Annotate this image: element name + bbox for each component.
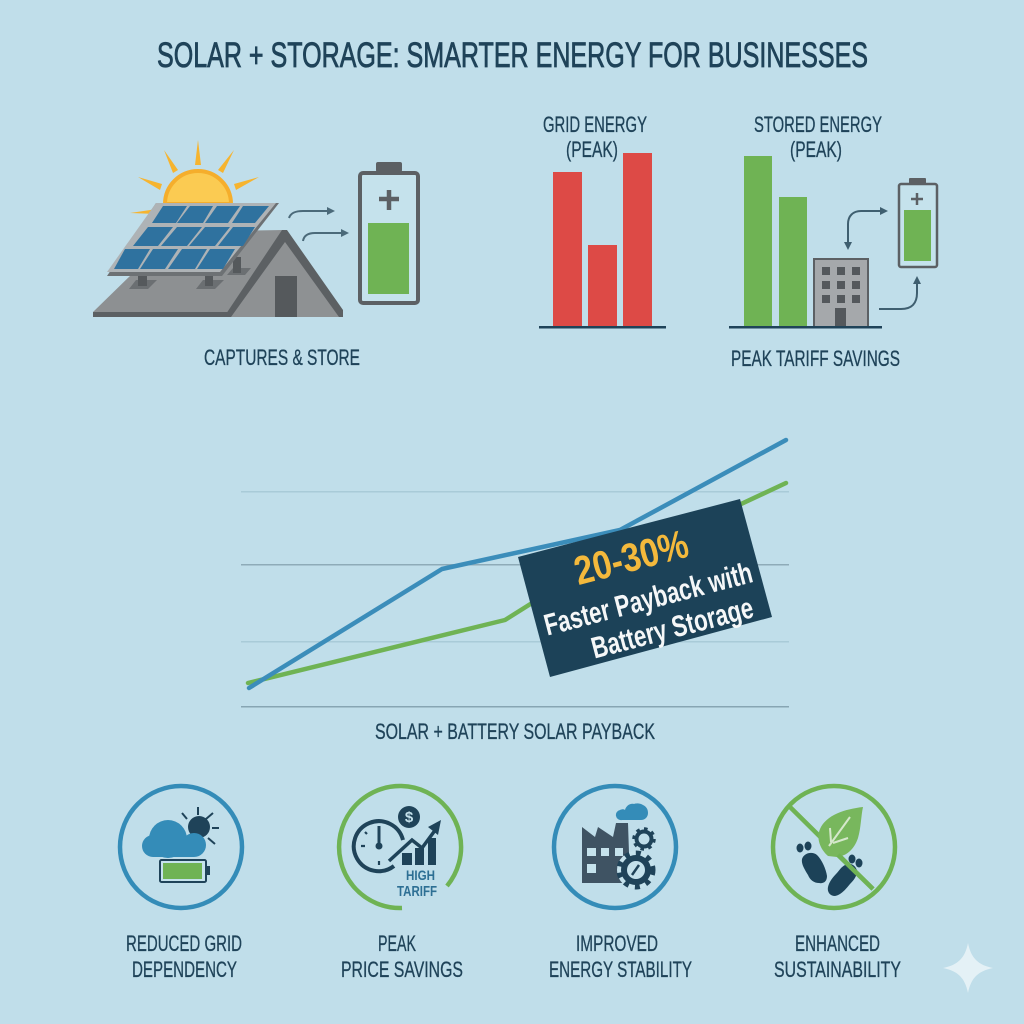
callout: faster payback [518, 499, 772, 677]
label: peak: PEAK [378, 931, 416, 956]
arrowhead lower [341, 229, 349, 237]
icon ring [120, 786, 242, 908]
heading: stored energy: STORED ENERGY [754, 112, 882, 137]
arrow: panel to battery upper [289, 211, 329, 218]
icon: battery [360, 162, 418, 303]
arrowhead upper [327, 207, 335, 215]
icon: clock [354, 821, 403, 871]
icon: solar panel [107, 203, 279, 276]
panel: payback chart [241, 440, 789, 744]
icon: small gear [634, 829, 654, 849]
heading: peak: (PEAK) [566, 137, 618, 162]
bar chart: red bars [553, 153, 652, 327]
label: energy stability: ENERGY STABILITY [549, 957, 692, 982]
icon: rising arrow [389, 820, 441, 861]
icon: sun [130, 140, 259, 214]
benefit: peak price savings [339, 786, 463, 982]
icon ring arc [339, 786, 461, 908]
text: tariff: TARIFF [397, 883, 437, 900]
benefit: enhanced sustainability [773, 786, 901, 982]
icon: sun behind cloud [182, 807, 219, 844]
icon: dollar coin [398, 806, 420, 828]
arrow: panel to battery lower [303, 233, 342, 241]
line: solar + battery [249, 440, 786, 688]
label: enhanced: ENHANCED [795, 931, 880, 956]
panel: grid energy peak [539, 112, 666, 328]
benefit: improved energy stability [549, 786, 692, 982]
callout text line 2: Battery Storage [588, 592, 757, 665]
label: price savings: PRICE SAVINGS [341, 957, 463, 982]
benefit: reduced grid dependency [120, 786, 242, 982]
label: dependency: DEPENDENCY [132, 957, 237, 982]
callout text line 1: Faster Payback with [541, 557, 756, 642]
icon: factory [582, 823, 630, 883]
bar chart: green bars [744, 156, 807, 327]
arrow: grid to battery [879, 276, 921, 309]
heading: grid energy: GRID ENERGY [543, 112, 647, 137]
chart baseline [729, 326, 882, 328]
callout figure: 20-30% [570, 522, 693, 594]
icon ring [554, 786, 676, 908]
heading: stored peak: (PEAK) [790, 137, 842, 162]
icon: office building [814, 259, 868, 327]
icon: large gear [617, 851, 655, 889]
icon: cloud [142, 820, 206, 858]
icon: building roof [93, 230, 343, 317]
icon: dollar coin: $ [405, 809, 414, 826]
icon: footprints [796, 842, 862, 896]
label: peak tariff savings: PEAK TARIFF SAVINGS [731, 346, 900, 371]
chart baseline [539, 326, 666, 328]
icon: battery [160, 860, 210, 882]
icon ring [773, 786, 895, 908]
label: captures and store: CAPTURES & STORE [204, 345, 360, 370]
panel: captures and store [93, 140, 418, 370]
panel: stored energy peak [729, 112, 937, 371]
icon: cloud [616, 803, 648, 820]
arrow: two-way building to battery [844, 207, 888, 250]
label: sustainability: SUSTAINABILITY [774, 957, 901, 982]
chart grid lines [241, 491, 789, 708]
icon: prohibition slash [790, 807, 873, 889]
slash over foot [838, 855, 873, 889]
line: solar payback [248, 483, 786, 683]
label: improved: IMPROVED [576, 931, 658, 956]
label: reduced grid: REDUCED GRID [126, 931, 242, 956]
icon: leaf [818, 807, 863, 857]
chart caption: SOLAR + BATTERY SOLAR PAYBACK [375, 719, 655, 744]
text: high: HIGH [406, 867, 435, 883]
icon: rising bars [402, 838, 436, 865]
icon: sparkle mark [943, 943, 993, 993]
icon: small battery [899, 178, 937, 267]
